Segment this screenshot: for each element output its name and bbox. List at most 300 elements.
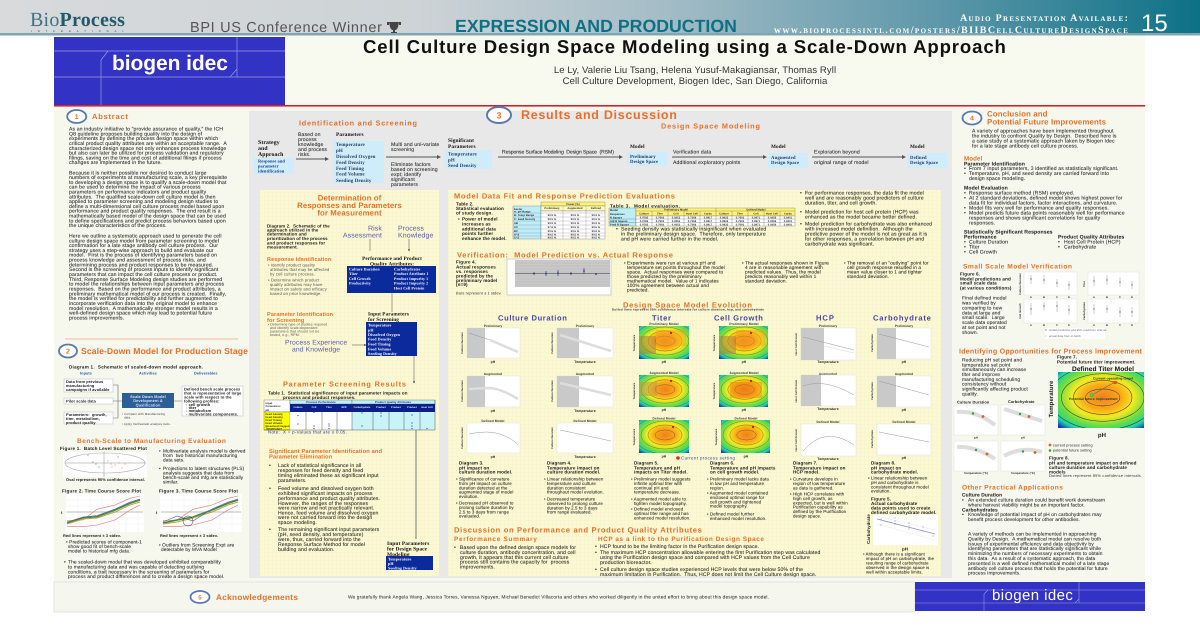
small scale text: Final defined model: [962, 296, 1007, 302]
plots: HCP vs temperature: Preliminary: [819, 324, 837, 328]
verification bullet 2: predicted values. Thus, the model: [745, 270, 821, 276]
elimination bullets: performance and product quality attributes.: [278, 496, 380, 502]
small scale text: small scale. Large: [962, 315, 1005, 321]
plots: carbohydrate vs pH: Carbohydrate: [871, 382, 874, 400]
abstract text: Here we outline a systematic approach used to generate the cell: [69, 233, 222, 239]
diagram 1 schematic: Activities: [139, 372, 157, 376]
model fit bullets: duration, titer, and cell growth.: [805, 200, 877, 206]
figure 6 charts: B: [1043, 324, 1045, 327]
figure 6 caption: Figure 6.: [960, 272, 980, 276]
heat maps: cell growth: pH: [742, 408, 747, 412]
augmented model: Augmented: [771, 155, 796, 161]
significant parameters: pH: [448, 158, 455, 164]
diagram 1 schematic: [64, 372, 243, 426]
parameters list: pH: [336, 148, 343, 154]
table 3: 0.9256: [768, 224, 777, 226]
defined model: [907, 144, 947, 168]
model summary text: •: [1058, 244, 1060, 250]
figure 6 charts: model prediction and 95% prediction interval: [1049, 329, 1107, 332]
parameters list: Parameters: [336, 132, 364, 138]
verification arrow: Additional exploratory points: [673, 160, 741, 166]
plots: HCP vs temperature: Temperature: [817, 457, 839, 461]
diagram 6 notes: model topography.: [710, 504, 748, 509]
table 2: A^2: [514, 234, 520, 236]
model summary text: data fit for individual factors, factor interactions, and curvature.: [969, 200, 1118, 206]
abstract text: model. First is the process of identifying parameters based on: [69, 253, 217, 259]
abstract text: well-defined design space which may lead to potential future: [69, 311, 212, 317]
table 2: AB: [514, 222, 518, 225]
exploration arrow: Exploration beyond: [814, 150, 860, 156]
model summary text: Performance: [964, 234, 997, 240]
model fit bullets: •: [800, 210, 802, 216]
figure 6 charts: Culture Duration: [1019, 273, 1022, 295]
diagram 2 caption: determination and: [267, 232, 307, 236]
table 2: C^2: [514, 236, 520, 240]
performance and product quality attributes: Product Impurity 1: [394, 277, 428, 281]
diagram 3 notes: from pH impact on culture: [459, 481, 512, 486]
model fit heading: Model Data Fit and Response Prediction Evaluations: [454, 192, 675, 200]
table 2: B: Temp Range: [514, 214, 535, 217]
abstract text: mathematically based model of the design space that can be used: [69, 214, 226, 220]
diagram 1 schematic: Qualification: [136, 402, 161, 408]
diagram 7 notes: expected, but is well within: [793, 500, 848, 505]
performance and product quality attributes: Host Cell Protein: [394, 286, 425, 290]
current process setting legend: Current process setting: [681, 456, 735, 460]
HCP link: HCP as a link to the Purification Design Space: [598, 536, 764, 543]
model summary text: •: [964, 206, 966, 212]
acknowledgements text: We gratefully thank Angela Wang, Jessica Torres, Vanessa Nguyen, Michael Benedict Villacorta and others who worked diligently in the united effort to bring about this design space model.: [348, 594, 769, 600]
preliminary model: Model: [630, 144, 645, 150]
table 2: [513, 202, 605, 240]
panel: background columns: [54, 107, 1145, 612]
defined model: Defined: [910, 155, 927, 161]
significant parameters: Parameters: [448, 144, 476, 150]
diagram 6 notes: cell growth and tightened: [710, 499, 762, 504]
parameter identification: and identify scale-dependent: [270, 326, 318, 330]
performance summary: [454, 536, 576, 570]
input parameters for screening: for Screening: [368, 317, 399, 323]
panel: design space model evolution: [454, 300, 938, 578]
diagram 8 notes: consistent throughout model: [871, 484, 929, 489]
biogen idec logo panel: [54, 37, 285, 105]
based on process knowledge: and process: [298, 147, 327, 153]
abstract text: model resolution. A mathematically stronger model results in a: [69, 306, 218, 312]
table 1: Product: [391, 406, 401, 409]
table 1: Carbohydrate: [354, 406, 371, 409]
arrow: experience to inputs: [352, 344, 366, 346]
plots: carbohydrate vs pH: Preliminary: [895, 324, 913, 328]
input parameters for design space modeling: Temperature: [388, 556, 411, 562]
icon: section number 5: [190, 591, 210, 603]
arrow: to parameters: [296, 158, 328, 160]
elimination heading: Parameter Elimination: [269, 454, 333, 460]
column headings: Culture Duration: [498, 314, 567, 322]
panel: abstract: [0, 0, 229, 321]
diagram 3 notes: Diagram 3.: [459, 460, 484, 466]
scale-down conclusion: to manufacturing data and was capable of detecting outlying: [68, 564, 204, 570]
determination heading: for Measurement: [317, 208, 382, 218]
verification bullet 3: mean value closer to 1 and tighter: [847, 270, 922, 276]
response identification: • Identify product quality: [268, 262, 316, 268]
diagram 7 notes: • Curvature develops in: [790, 476, 838, 482]
model summary text: Product Quality Attributes: [1058, 234, 1124, 240]
heat maps: titer: Preliminary Model: [649, 322, 679, 326]
evolution heading: Design Space Model Evolution: [623, 300, 752, 310]
HCP link: •: [595, 567, 597, 573]
verification bullet 2: The actual responses shown in Figure: [745, 260, 829, 266]
seeding density note: and pH were carried further in the model.: [621, 236, 719, 242]
performance summary: improvements.: [460, 564, 495, 570]
diagram 7 notes: • High HCP correlates with: [790, 492, 845, 496]
diagram 5 notes: • Defined model enclosed: [631, 506, 684, 512]
model summary text: •: [964, 250, 966, 256]
process experience: and Knowledge: [292, 346, 340, 354]
figure 1 scatter plot: [60, 446, 147, 482]
table 3: 0.7692: [656, 224, 665, 226]
elimination bullets: responses for feed density and feed: [278, 468, 363, 474]
elimination bullets: Hence, feed volume and dissolved oxygen: [278, 510, 379, 516]
conclusion intro: a case study of a systematic approach taken by Biogen Idec: [972, 138, 1115, 144]
diagram 7 notes: Purification capability as: [793, 505, 843, 510]
closing paragraph: minimizing the numbers of necessary experiments to obtain: [968, 551, 1103, 557]
parameters list: Feed Volume: [336, 172, 365, 178]
verification bullet 2: 4 are in reasonable agreement with: [745, 265, 823, 271]
table 1: Feed Timing: [266, 419, 282, 422]
diagram 3 notes: culture duration model.: [459, 470, 512, 474]
header banner: [0, 0, 1200, 37]
abstract text: strategy uses a step-wise approach to build and evaluate our: [69, 248, 214, 254]
table 3: 0.8401: [784, 224, 793, 226]
scale-down conclusion: •: [64, 560, 66, 566]
performance and product quality attributes: Productivity: [349, 282, 371, 286]
diagram 5 notes: Temperature and pH: [634, 466, 681, 470]
model fit bullets: For performance responses, the data fit the model: [805, 190, 924, 196]
exploration arrow: original range of model: [814, 160, 869, 166]
figure 8 charts: Temperature (°C): [1011, 471, 1035, 475]
model summary text: Carbohydrate: [1064, 244, 1096, 250]
verification bullet 1: temperature set points throughout the model: [627, 265, 725, 271]
table 3: 0.9835: [720, 216, 729, 220]
BioProcess International logo: INTERNATIONAL: [31, 30, 124, 33]
strategy and approach: identification: [258, 168, 285, 174]
table 3: Responses: [610, 213, 625, 216]
table 3: 0.9785: [640, 216, 649, 220]
HCP link: maximum limitation in Purification. Thus, HCP does not limit the Cell Culture design space.: [600, 572, 816, 578]
performance and product quality attributes: Culture Duration: [349, 268, 380, 272]
table 3: Cell: [673, 212, 679, 216]
closing paragraph: Quality by Design. A mathematical model can resolve both: [968, 536, 1101, 542]
parameter identification: for Screening: [267, 317, 305, 324]
performance and product quality attributes: Carbohydrates: [394, 268, 421, 272]
figure 8 charts: pH: [1021, 436, 1025, 440]
input parameters for design space modeling: pH: [388, 561, 394, 566]
based on process knowledge: Based on: [298, 132, 321, 138]
table 3: Host Cell: [686, 212, 698, 216]
conclusion heading: Potential Future Improvements: [987, 118, 1107, 126]
closing paragraph: antibody cell culture process that holds the potential for future: [968, 566, 1108, 572]
model summary text: Titer: [969, 244, 980, 250]
diagram 1 schematic: Data from previous: [66, 379, 103, 384]
plots: culture duration vs temperature: Culture Duration: [551, 332, 554, 354]
figure 1 scatter plot: Oval represents 95% confidence interval.: [66, 477, 145, 482]
risk assessment: Risk: [368, 224, 382, 232]
diagram 1 schematic: product quality: [66, 420, 96, 425]
model summary text: Response surface method (RSM) employed.: [969, 190, 1074, 196]
diagram 5 notes: enhanced model resolution.: [634, 515, 691, 520]
results and discussion heading: Results and Discussion: [521, 108, 677, 122]
table 3: 0.8917: [704, 224, 713, 226]
icon: section number 2: 2: [66, 348, 70, 356]
model summary text: Temperature, pH, and seed density are carried forward into: [969, 171, 1109, 177]
figure 8 charts: Culture Duration: [957, 400, 990, 404]
figure 3 time course plot: [156, 488, 242, 538]
opportunities text: Reducing pH set point and: [962, 358, 1022, 364]
diagram 6 notes: Temperature and pH impacts: [710, 466, 776, 470]
abstract text: performance and product quality responses. The end result is a: [69, 209, 221, 215]
table 3 caption: Table 3. Model evaluation.: [610, 204, 680, 208]
table 3: 0.8971: [752, 220, 761, 223]
table 1 caption: Table 1. Statistical significance of input parameter impacts on: [268, 390, 408, 396]
response identification: Response Identification: [267, 257, 332, 263]
conclusion intro: for a late stage antibody cell culture process.: [972, 144, 1078, 150]
table 3: 0.8971: [752, 224, 761, 226]
poster title bar: [54, 36, 1145, 107]
response identification: impact on safety and efficacy: [270, 286, 328, 292]
table 1: Culture: [293, 406, 303, 409]
elimination bullets: Feed volume and dissolved oxygen both: [278, 486, 374, 492]
performance summary: growth, it appears that this current cell culture: [460, 555, 569, 561]
figure 3 note: detectable by MVA Model: [161, 547, 217, 553]
opportunities text: significantly affecting product: [962, 387, 1028, 393]
heat maps: titer: pH: [662, 454, 667, 458]
defined model: Design Space: [910, 160, 938, 166]
table 3: 0.7692: [656, 216, 665, 220]
table 2: 97.6 %: [548, 226, 557, 229]
input parameters for screening: Feed Volume: [368, 346, 391, 352]
table 3: Adj R Square: [610, 220, 628, 223]
diagram 8 notes: pH impact on: [871, 466, 901, 470]
table 3: 0.8917: [704, 220, 713, 223]
heat maps: cell growth: Temperature: [713, 382, 716, 399]
heat maps: titer: Defined Model: [652, 416, 676, 420]
performance summary: process still contains the capacity for process: [460, 560, 570, 566]
table 3: 0.7692: [656, 220, 665, 223]
diagram 8 notes: carbohydrate model.: [871, 470, 918, 474]
heat maps: cell growth: pH: [744, 454, 749, 458]
table 2: 99.9 %: [592, 218, 601, 221]
figure 8 charts: [954, 399, 1045, 475]
model summary text: Model Evaluation: [964, 186, 1008, 192]
figure 7 caption: Potential future titer improvement.: [1057, 360, 1136, 364]
diagram 1 schematic: Parameters: growth,: [66, 412, 107, 417]
heat maps: titer: Temperature: [633, 382, 636, 399]
figure 4 chart: [507, 259, 611, 295]
abstract text: the model is verified for predictability and further augmented to: [69, 296, 218, 302]
diagram 8 notes: • Linear relationship between: [868, 476, 928, 480]
screening arrow and notes: screening: [391, 147, 414, 153]
plots: culture duration vs temperature: Temperature: [574, 360, 596, 364]
diagram 2 caption: measurement.: [267, 244, 298, 250]
RSM arrow: Response Surface Modeling Design Space (RSM): [502, 150, 614, 156]
table 2 bullet: Power of model: [462, 216, 498, 222]
column headings: Titer: [652, 314, 671, 322]
table 3: 0.8971: [752, 216, 761, 220]
table 2 bullet: •: [458, 216, 460, 222]
model summary text: •: [964, 171, 966, 177]
BioProcess International logo: BioProcess: [30, 9, 125, 31]
diagram 1 schematic: that is representative of large: [184, 390, 242, 396]
diagram 1 schematic: Inputs: [80, 372, 92, 376]
diagram 6 notes: in low pH and temperature: [710, 481, 764, 486]
HCP link: production bioreactor.: [600, 560, 652, 566]
diagram 1 schematic: • Compare with Manufacturing: [122, 412, 165, 416]
abstract heading: Abstract: [92, 112, 128, 121]
figure 5 caption: defined carbohydrate model.: [871, 510, 936, 515]
opportunities text: simultaneously can increase: [962, 367, 1026, 373]
input parameters for design space modeling: [386, 541, 433, 570]
preliminary model: [627, 144, 667, 166]
strategy and approach: parameter: [258, 164, 279, 168]
response identification: by cell culture process.: [270, 272, 315, 276]
model summary text: From 7 input parameters, 3 identified as statistically significant.: [969, 166, 1119, 172]
figure 4 caption: Actual responses: [456, 264, 496, 270]
heat maps: titer: Temperature: [633, 334, 636, 351]
diagram 1 schematic: - titer: [186, 405, 197, 410]
abstract text: applied to parameter screening and modeling design studies to: [69, 199, 218, 205]
table 1: pH: [266, 409, 269, 412]
panel: model data fit: [454, 190, 932, 296]
figure 3 note: • Outliers from Screening Expt are: [159, 542, 235, 548]
plots: culture duration vs pH: Culture Duration: [461, 332, 464, 354]
elimination bullets: •: [269, 527, 271, 533]
verification bullet 1: those predicted by the preliminary: [627, 274, 702, 280]
abstract text: can be used to determine the impact of various process: [69, 185, 201, 191]
HCP link: •: [595, 550, 597, 556]
screening arrow and notes: expt; identify: [391, 172, 422, 178]
other applications text: An extended culture duration could benefit work downstream: [968, 498, 1105, 504]
performance summary: Based upon the defined design space models for: [460, 545, 576, 551]
abstract text: critical product quality attributes are within an acceptable range. A: [69, 141, 227, 147]
diagram 4 notes: Temperature impact on: [547, 466, 600, 470]
diagram 6 notes: on cell growth model.: [710, 470, 759, 474]
table 2: 99.9 %: [571, 222, 580, 225]
audio presentation link: [774, 13, 1128, 36]
diagram 4 notes: duration consistent: [547, 485, 586, 490]
diagram 1 schematic: Pilot scale data: [66, 398, 97, 404]
diagram 7 notes: defined by the Purification: [793, 509, 847, 514]
diagram 6 notes: Diagram 6.: [710, 460, 734, 466]
closing paragraph: A variety of methods can be implemented in approaching: [968, 532, 1097, 538]
diagram 7 notes: as data is gathered.: [793, 485, 834, 490]
model summary text: •: [964, 190, 966, 196]
abstract text: Second is the screening of process inputs to identify significant: [69, 267, 219, 273]
diagram 5 notes: optimal titer range and has: [634, 511, 689, 516]
model summary text: Parameter Identification: [964, 162, 1025, 168]
model summary text: •: [964, 166, 966, 172]
based on process knowledge: risks.: [298, 152, 311, 158]
figure 6 charts: D: [1131, 296, 1133, 299]
elimination bullets: •: [269, 486, 271, 492]
plots: HCP vs temperature: Defined Model: [816, 420, 840, 424]
plots: HCP vs temperature: Host Cell Protein: [795, 332, 798, 355]
diagram 4 notes: from range evaluated.: [547, 510, 592, 515]
audio presentation link: Audio Presentation Available:: [960, 13, 1128, 24]
abstract text: process improvements.: [69, 315, 124, 321]
table 2 bullet: enhance the model.: [462, 236, 507, 241]
abstract text: confirmation for a late stage antibody cell culture process. Our: [69, 243, 218, 249]
table 1: Product Quality Attributes: [375, 401, 411, 404]
plots: culture duration vs pH: Preliminary: [484, 324, 502, 328]
poster title: Cell Culture Design Space Modeling using a Scale-Down Approach: [363, 36, 1006, 57]
conclusion intro: the industry to confront Quality by Design. Described here is: [972, 134, 1117, 140]
performance and product quality attributes: Titer: [349, 272, 358, 276]
discussion heading: Discussion on Performance and Product Quality Attributes: [454, 526, 702, 534]
diagram 5 notes: [631, 460, 691, 520]
performance and product quality attributes: Product Attribute 1: [394, 272, 428, 276]
heat maps: cell growth: Augmented Model: [729, 371, 759, 375]
model summary text: •: [964, 240, 966, 246]
heat maps: cell growth: [713, 322, 777, 458]
abstract text: define a multi-dimensional cell culture process model based upon: [69, 204, 224, 210]
elimination bullets: (pH, seed density, and temperature): [278, 532, 364, 538]
table 2: C: Seed Density: [514, 218, 536, 221]
table 2: 99.5 %: [571, 236, 580, 240]
heat maps: titer: pH: [662, 408, 667, 412]
verification bullet 1: Experiments were run at various pH and: [627, 260, 716, 266]
screening arrow and notes: Multi and uni-variate: [391, 142, 439, 148]
diagram 2 caption: and product responses for: [267, 240, 325, 246]
table 2 bullet: additional data: [462, 226, 496, 232]
heat maps: titer: [633, 322, 696, 458]
figure 2 note: show good fit of bench-scale: [68, 544, 131, 550]
table 1: Cell: [312, 406, 317, 409]
small scale heading: Small Scale Model Verification: [963, 264, 1072, 270]
model heading: Model: [964, 156, 983, 162]
plots: culture duration vs temperature: Temperature: [574, 409, 596, 413]
diagram 8 notes: [868, 460, 929, 494]
table 2: 99.5 %: [571, 226, 580, 229]
figure 6 charts: B: [1106, 296, 1108, 299]
risk assessment: Assessment: [343, 232, 382, 240]
figure 6 charts: D: [1131, 324, 1133, 327]
figure 6 charts: B: [1043, 296, 1045, 299]
icon: section number 3: [487, 107, 511, 123]
table 3: 0.7268: [688, 224, 697, 226]
verification bullet 2: standard deviation.: [745, 278, 787, 284]
plots: culture duration vs pH: Augmented: [484, 372, 502, 376]
table 3: Preliminary Model: [664, 208, 688, 212]
flow heading: Identification and Screening: [299, 118, 417, 128]
based on process knowledge: process: [298, 137, 317, 143]
abstract text: the unique characteristics of the process.: [69, 223, 167, 229]
column headings: [498, 314, 931, 322]
model summary text: design space modeling.: [969, 176, 1025, 182]
model summary text: •: [964, 196, 966, 202]
other applications text: •: [962, 513, 964, 518]
conclusion intro: A variety of approaches have been implemented throughout: [972, 128, 1114, 134]
small scale text: scale data operated: [962, 320, 1007, 326]
other applications text: benefit process development for other antibodies.: [968, 517, 1080, 523]
elimination bullets: Lack of statistical significance in all: [278, 463, 361, 469]
icon: trophy: [387, 22, 401, 33]
table 1: SPR: [341, 406, 347, 409]
figure 5 note: well within acceptable limits.: [866, 570, 923, 574]
seeding density note: •: [616, 226, 618, 232]
table 1: Product: [407, 406, 417, 409]
figure 2 time course plot: [61, 488, 144, 538]
diagram 8 notes: evolution.: [871, 489, 891, 494]
performance and product quality attributes: [347, 256, 436, 293]
